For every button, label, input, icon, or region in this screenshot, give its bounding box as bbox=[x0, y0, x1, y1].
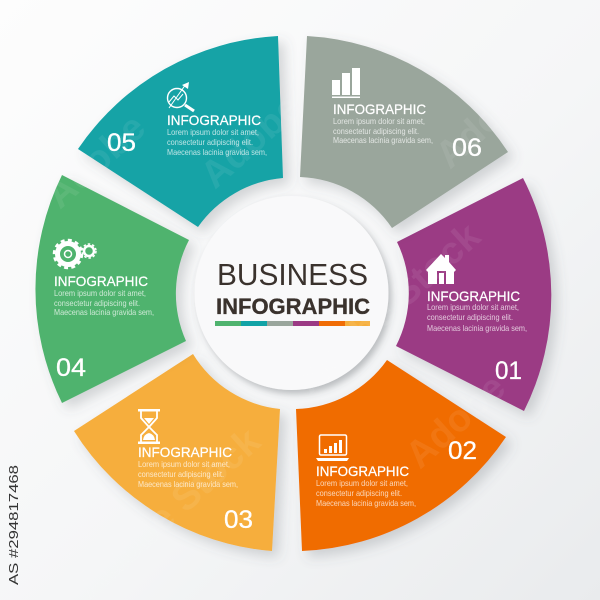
heading: 04: INFOGRAPHIC bbox=[54, 273, 148, 289]
text: 05 body bbox=[167, 127, 267, 157]
heading: 03: INFOGRAPHIC bbox=[138, 444, 232, 460]
text: 01 body bbox=[427, 302, 527, 333]
title: BUSINESS: BUSINESS bbox=[217, 257, 368, 292]
number: 06: 06 bbox=[452, 134, 482, 162]
heading: 06: INFOGRAPHIC bbox=[333, 101, 426, 117]
stock watermark: Adobe Stock bbox=[288, 214, 489, 402]
number: 01: 01 bbox=[495, 357, 522, 385]
number: 02: 02 bbox=[448, 437, 477, 465]
heading: 05: INFOGRAPHIC bbox=[167, 112, 261, 128]
text: 06 body: consectetur adipiscing elit. bbox=[333, 126, 419, 136]
text: 03 body bbox=[138, 459, 238, 489]
stock watermark: Adobe bbox=[428, 66, 544, 177]
center circle bbox=[194, 196, 388, 390]
text: 01 body: Maecenas lacinia gravida sem, bbox=[427, 323, 527, 333]
number: 05: 05 bbox=[107, 129, 136, 157]
text: 02 body: Maecenas lacinia gravida sem, bbox=[316, 498, 416, 508]
text: 04 body: consectetur adipiscing elit. bbox=[54, 298, 140, 308]
stock watermark: Adobe bbox=[398, 366, 514, 477]
number: 03: 03 bbox=[224, 506, 253, 534]
panel: 03 yellow segment bbox=[74, 354, 280, 551]
text: 04 body bbox=[54, 288, 154, 317]
text: 01 body: Lorem ipsum dolor sit amet, bbox=[427, 302, 519, 312]
colour bar bbox=[215, 321, 370, 326]
icon: hourglass bbox=[138, 409, 160, 444]
text: 05 body: Lorem ipsum dolor sit amet, bbox=[167, 127, 259, 137]
text: 03 body: consectetur adipiscing elit. bbox=[138, 469, 224, 479]
stock watermark bbox=[38, 66, 544, 600]
title: INFOGRAPHIC: INFOGRAPHIC bbox=[216, 294, 370, 319]
text: 06 body: Lorem ipsum dolor sit amet, bbox=[333, 116, 425, 126]
icon: house bbox=[426, 254, 456, 284]
icon: gears bbox=[54, 240, 96, 268]
panel: 02 orange segment bbox=[296, 360, 506, 551]
text: 01 body: consectetur adipiscing elit. bbox=[427, 312, 513, 322]
icon: bar chart bbox=[332, 68, 360, 98]
text: 02 body bbox=[316, 478, 416, 508]
text: 06 body bbox=[333, 116, 433, 145]
stock id label: AS #294817468 bbox=[6, 465, 21, 585]
icon: laptop chart bbox=[316, 435, 349, 461]
text: 03 body: Maecenas lacinia gravida sem, bbox=[138, 479, 238, 489]
text: 02 body: Lorem ipsum dolor sit amet, bbox=[316, 478, 408, 488]
icon: magnifier with arrow bbox=[168, 82, 194, 111]
text: 06 body: Maecenas lacinia gravida sem, bbox=[333, 135, 433, 145]
heading: 01: INFOGRAPHIC bbox=[427, 288, 520, 304]
panel: 01 magenta segment bbox=[396, 178, 551, 411]
text: 02 body: consectetur adipiscing elit. bbox=[316, 488, 402, 498]
text: 03 body: Lorem ipsum dolor sit amet, bbox=[138, 459, 230, 469]
text: 04 body: Maecenas lacinia gravida sem, bbox=[54, 307, 154, 317]
stock watermark: Adobe bbox=[38, 106, 154, 217]
panel: 06 grey segment bbox=[300, 36, 508, 228]
panel: 05 teal segment bbox=[78, 36, 283, 227]
text: 05 body: consectetur adipiscing elit. bbox=[167, 137, 253, 147]
text: 05 body: Maecenas lacinia gravida sem, bbox=[167, 147, 267, 157]
panel: 04 green segment bbox=[35, 175, 189, 403]
number: 04: 04 bbox=[56, 354, 86, 382]
heading: 02: INFOGRAPHIC bbox=[316, 463, 409, 479]
text: 04 body: Lorem ipsum dolor sit amet, bbox=[54, 288, 146, 298]
stock watermark: Adobe bbox=[193, 86, 309, 197]
